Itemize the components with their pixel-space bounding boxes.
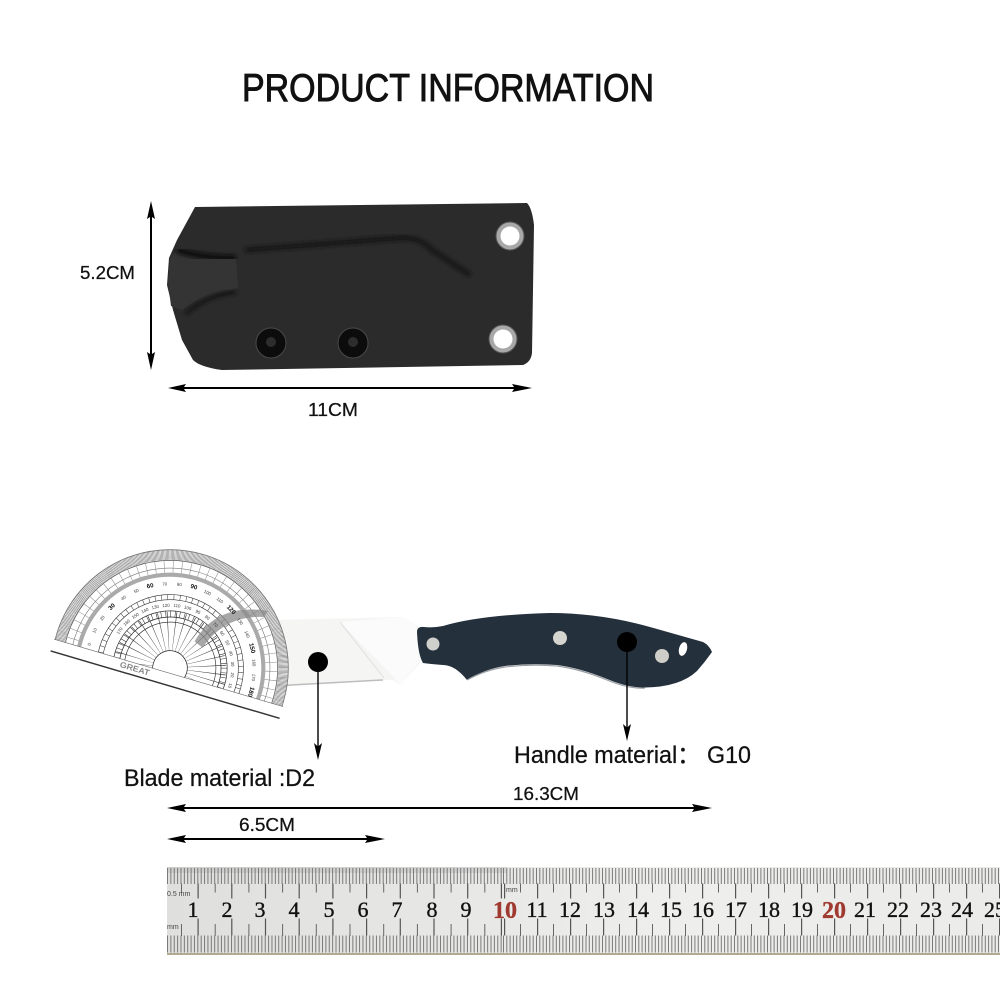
protractor scale numbers: 70 [162, 581, 168, 587]
protractor scale numbers: 90 [190, 583, 199, 592]
ruler numbers: 23 [920, 897, 942, 922]
ruler unit labels: mm [167, 924, 179, 931]
ruler numbers: 16 [692, 897, 714, 922]
protractor scale numbers: 40 [228, 650, 234, 657]
ruler unit labels [167, 887, 518, 931]
protractor scale numbers: 130 [151, 604, 160, 610]
blade material label: Blade material :D2 [124, 765, 315, 792]
sheath [167, 203, 534, 370]
protractor scale numbers [85, 559, 279, 698]
ruler numbers: 24 [951, 897, 973, 922]
ruler numbers: 10 [493, 898, 517, 924]
protractor scale numbers: 100 [183, 604, 192, 611]
ruler numbers [188, 897, 1000, 924]
protractor scale numbers: 10 [227, 683, 233, 689]
ruler numbers: 7 [392, 897, 402, 922]
protractor scale numbers: 10 [91, 627, 98, 634]
protractor scale numbers: 90 [195, 609, 202, 615]
protractor scale numbers: 160 [122, 618, 132, 627]
ruler ticks [167, 876, 1000, 944]
protractor scale numbers: 120 [225, 604, 237, 617]
protractor scale numbers: 180 [246, 686, 255, 698]
width arrow [168, 384, 532, 392]
blade [230, 617, 420, 687]
ruler unit labels: mm [506, 887, 518, 894]
ruler numbers: 5 [324, 897, 334, 922]
ruler numbers: 19 [791, 897, 813, 922]
protractor scale numbers: 60 [219, 630, 226, 637]
ruler numbers: 12 [559, 897, 581, 922]
handle pin 1 [426, 638, 440, 650]
protractor blade shadow [194, 609, 268, 648]
ruler numbers: 2 [222, 897, 232, 922]
protractor scale numbers: 150 [131, 611, 140, 620]
protractor scale numbers: 100 [203, 589, 212, 597]
ruler numbers: 15 [660, 897, 682, 922]
ruler numbers: 20 [822, 898, 846, 924]
ruler numbers: 22 [887, 897, 909, 922]
handle material label: Handle material： G10 [514, 742, 751, 769]
sheath eyelet bottom [489, 325, 517, 353]
height label: 5.2CM [80, 262, 135, 283]
protractor scale numbers: 20 [229, 672, 235, 678]
ruler numbers: 8 [426, 897, 438, 922]
protractor scale numbers: 70 [212, 621, 219, 629]
blade length label: 6.5CM [239, 814, 295, 835]
sheath eyelet top [496, 222, 524, 250]
protractor scale numbers: 160 [251, 659, 257, 667]
ruler numbers: 3 [254, 897, 266, 922]
protractor scale numbers: 140 [243, 630, 251, 639]
handle [417, 613, 712, 688]
total length arrow [167, 804, 712, 812]
handle pin 2 [553, 631, 567, 645]
protractor brand: GREAT [119, 660, 151, 677]
ruler numbers: 17 [725, 897, 747, 922]
protractor scale numbers: 0 [87, 642, 92, 646]
ruler numbers: 4 [288, 897, 300, 922]
protractor [50, 549, 289, 719]
protractor scale numbers: 170 [251, 673, 256, 682]
handle hole [677, 641, 689, 657]
protractor scale numbers: 30 [107, 602, 117, 612]
protractor scale numbers: 170 [115, 626, 124, 635]
title: PRODUCT INFORMATION [242, 67, 654, 110]
protractor scale numbers: 60 [146, 582, 155, 590]
height arrow [147, 201, 155, 370]
protractor scale numbers: 110 [216, 596, 225, 605]
blade length arrow [167, 835, 385, 843]
protractor scale numbers: 50 [133, 587, 140, 594]
ruler numbers: 1 [188, 897, 198, 922]
protractor scale numbers: 80 [177, 582, 183, 587]
knife [230, 613, 712, 688]
protractor scale numbers: 20 [99, 614, 106, 622]
ruler [167, 867, 1000, 955]
ruler numbers: 21 [854, 897, 876, 922]
protractor scale numbers: 120 [162, 603, 170, 608]
protractor scale numbers: 110 [173, 603, 181, 609]
protractor scale numbers: 40 [120, 594, 127, 601]
protractor scale numbers: 130 [236, 617, 244, 626]
sheath screw right [338, 328, 368, 358]
ruler numbers: 9 [460, 897, 472, 922]
ruler numbers: 11 [526, 897, 548, 922]
ruler numbers: 14 [627, 897, 649, 922]
handle marker [617, 632, 637, 741]
protractor scale numbers: 50 [224, 640, 231, 647]
protractor scale numbers: 80 [204, 614, 211, 621]
ruler numbers: 6 [358, 897, 368, 922]
protractor scale numbers: 30 [230, 661, 235, 667]
handle pin 3 [655, 649, 669, 663]
ruler numbers: 13 [593, 897, 615, 922]
blade marker [308, 652, 328, 760]
ruler unit labels: 0.5 mm [167, 891, 191, 898]
width label: 11CM [308, 399, 358, 420]
total length label: 16.3CM [513, 783, 579, 804]
sheath screw left [256, 328, 286, 358]
ruler numbers: 18 [758, 897, 780, 922]
protractor scale numbers: 150 [247, 642, 257, 655]
protractor scale numbers: 140 [141, 607, 150, 614]
